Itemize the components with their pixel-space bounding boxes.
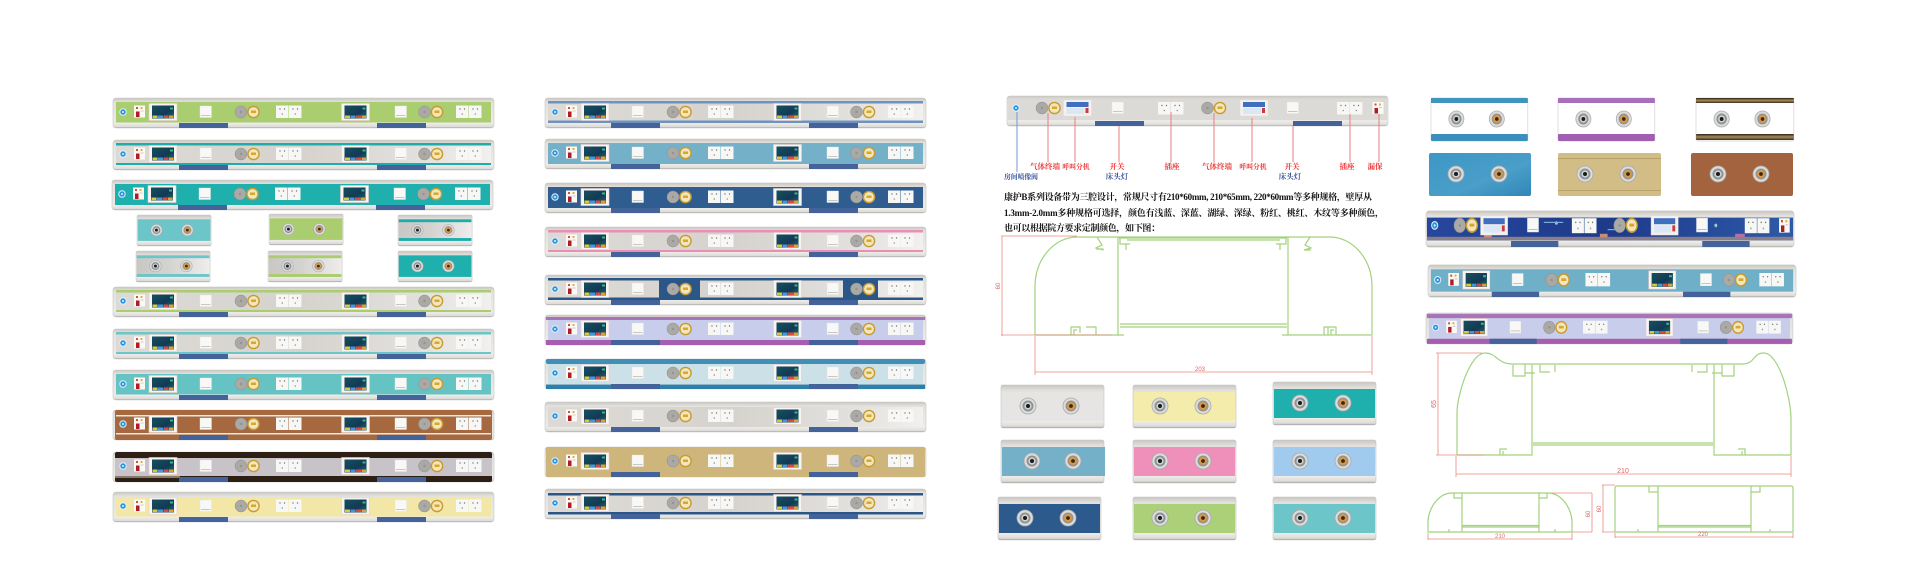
tile: sky blue <box>1001 440 1105 483</box>
tile: light teal <box>1273 497 1376 540</box>
tile: white with blue edges <box>1431 98 1528 141</box>
rail: silver with pink stripes <box>545 227 926 257</box>
rail: silver with steel blue stripes <box>545 98 926 128</box>
panel: rail colour options column 1 <box>112 98 494 522</box>
rail: ocean scene <box>1426 211 1794 247</box>
tile: teal <box>398 251 472 282</box>
tile: silver with teal stripes <box>398 215 472 246</box>
rail: annotated silver rail <box>1007 96 1388 126</box>
rail: silver with green stripes <box>113 287 494 317</box>
profile drawing: rectangular section: 60 <box>1597 505 1603 512</box>
rail: gold wood grain <box>545 447 926 477</box>
rail: silver plain <box>545 402 926 432</box>
rail: wood grain <box>113 410 494 440</box>
component labels: 床头灯 <box>1106 171 1129 181</box>
rail: silver with navy stripes <box>545 489 926 519</box>
rail: navy solid <box>545 183 926 213</box>
profile drawing: rectangular section: 220 <box>1698 532 1709 538</box>
panel: colour tiles and profile sections <box>1426 98 1796 540</box>
rail: sky blue solid <box>545 139 926 169</box>
component labels: 呼叫分机 <box>1062 162 1090 171</box>
tile: navy <box>998 497 1101 540</box>
profile drawing: three-chamber section: 60 <box>996 282 1002 289</box>
profile drawing: rectangular section <box>1597 485 1793 538</box>
tile: white with bronze edges <box>1696 98 1794 141</box>
component labels: 插座 <box>1340 161 1355 171</box>
component labels: 气体终端 <box>1030 161 1060 171</box>
component labels: 插座 <box>1164 161 1180 171</box>
rail: yellow solid <box>113 492 494 522</box>
tile: pale blue <box>1273 440 1376 483</box>
tile: blue <box>1429 153 1531 196</box>
tile: pink <box>1133 440 1236 483</box>
tile: green <box>1133 497 1236 540</box>
profile drawing: small rounded section: 210 <box>1495 534 1506 540</box>
profile drawing: curved section <box>1431 353 1791 477</box>
rail: lavender with purple edges <box>545 315 926 345</box>
component labels <box>1004 161 1383 181</box>
tile: silver <box>1001 385 1104 428</box>
rail: teal blue solid <box>1428 265 1796 297</box>
profile drawing: curved section: 210 <box>1617 468 1629 475</box>
component labels: 呼叫分机 <box>1239 162 1267 171</box>
rail: silver with light teal stripes <box>113 329 494 359</box>
description paragraph: 也可以根据院方要求定制颜色，如下图： <box>1004 222 1160 234</box>
rail: teal solid <box>112 180 493 210</box>
panel: annotated rail and specification <box>996 96 1388 540</box>
tile: gold wood <box>1558 153 1661 196</box>
description paragraph: 1.3mm-2.0mm多种规格可选择，颜色有浅蓝、深蓝、湖绿、深绿、粉红、桃红、木纹等多种颜色， <box>1004 207 1384 219</box>
description paragraph <box>1004 191 1384 234</box>
profile drawing: three-chamber section <box>996 236 1372 375</box>
component labels: 开关 <box>1284 161 1300 171</box>
component labels: 开关 <box>1110 161 1125 171</box>
profile drawing: small rounded section <box>1428 493 1592 540</box>
rail: silver with navy stripes and blocks <box>545 275 926 305</box>
panel: rail colour options column 2 <box>545 98 926 519</box>
rail: pale blue with blue edges <box>545 359 926 389</box>
tile: silver with light teal stripes <box>136 251 210 282</box>
rail: green solid <box>113 98 494 128</box>
rail: silver with teal stripes <box>113 140 494 170</box>
tile: green <box>269 214 343 245</box>
tile: wood <box>1691 153 1793 196</box>
profile drawing: small rounded section: 60 <box>1586 510 1592 517</box>
component labels: 房间喷像阀 <box>1004 172 1038 181</box>
rail: light teal solid <box>113 370 494 400</box>
tile: yellow <box>1133 385 1236 428</box>
component labels: 床头灯 <box>1279 171 1302 181</box>
description paragraph: 康护B系列设备带为三腔设计，常规尺寸有210*60mm, 210*65mm, 220*60mm等多种规格，壁厚从 <box>1004 191 1372 203</box>
tile: silver with green stripes <box>268 251 342 282</box>
tile: white with purple edges <box>1558 98 1655 141</box>
rail: lavender with purple edges <box>1426 313 1793 344</box>
tile: light teal <box>137 215 211 246</box>
profile drawing: curved section: 65 <box>1431 400 1438 408</box>
component labels: 漏保 <box>1368 161 1383 171</box>
component labels: 气体终端 <box>1202 161 1232 171</box>
rail: dark brown with lavender band <box>113 452 494 482</box>
tile: teal <box>1273 382 1376 425</box>
profile drawing: three-chamber section: 203 <box>1195 367 1206 373</box>
leader lines <box>1017 112 1379 172</box>
